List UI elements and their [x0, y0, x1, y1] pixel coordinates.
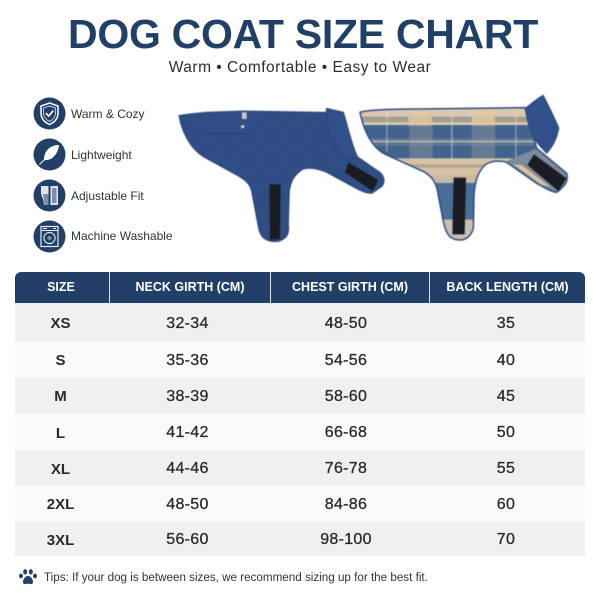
feature label: warm and cozy: Warm & Cozy [71, 107, 145, 121]
row M [15, 377, 585, 413]
row S: 40 [497, 352, 515, 368]
icon: paw print [19, 569, 37, 584]
tip text: Tips: If your dog is between sizes, we recommend sizing up for the best fit. [44, 571, 428, 584]
title: DOG COAT SIZE CHART [68, 11, 538, 57]
row XS: 48-50 [325, 314, 367, 332]
row 3XL: 70 [497, 531, 515, 548]
icon: feather lightweight [34, 138, 66, 170]
row M: 45 [497, 388, 515, 404]
feature label: adjustable fit: Adjustable Fit [71, 189, 144, 203]
row XL: 44-46 [166, 460, 209, 477]
row 2XL [15, 485, 585, 521]
row 2XL: 60 [497, 496, 515, 512]
row 2XL: 84-86 [325, 496, 367, 512]
table header row: NECK GIRTH (CM) [135, 280, 244, 294]
row M: 58-60 [325, 388, 367, 404]
row L: L [56, 424, 65, 442]
icon: adjustable fit straps [34, 180, 66, 212]
row L: 66-68 [325, 424, 367, 441]
row 3XL: 56-60 [166, 531, 209, 548]
feature label: machine washable: Machine Washable [71, 229, 173, 243]
table header row: CHEST GIRTH (CM) [292, 280, 408, 294]
row S: 54-56 [325, 352, 367, 368]
row M: 38-39 [166, 388, 209, 404]
illustration: navy quilted coat [178, 107, 386, 243]
table header row: SIZE [47, 280, 75, 294]
icon: washing machine [34, 220, 66, 252]
row XL: 55 [497, 460, 515, 477]
row L: 50 [497, 424, 515, 441]
icon: shield warm and cozy [34, 98, 66, 130]
row 3XL: 98-100 [320, 531, 372, 548]
row XL: XL [51, 460, 70, 478]
row 3XL: 3XL [47, 532, 74, 548]
row S: S [55, 352, 66, 369]
subtitle: Warm • Comfortable • Easy to Wear [169, 59, 431, 76]
row 2XL: 48-50 [166, 496, 209, 512]
row XL: 76-78 [325, 460, 367, 477]
row L [15, 413, 585, 450]
row M: M [54, 388, 67, 405]
row XS: XS [50, 315, 70, 332]
row S [15, 341, 585, 377]
row L: 41-42 [166, 424, 209, 441]
row XS [15, 303, 585, 341]
row XL [15, 450, 585, 485]
row XS: 35 [497, 314, 515, 332]
table header row: BACK LENGTH (CM) [446, 280, 569, 294]
row S: 35-36 [166, 352, 209, 368]
row 2XL: 2XL [47, 496, 74, 513]
row 3XL [15, 521, 585, 556]
feature label: lightweight: Lightweight [71, 148, 132, 162]
row XS: 32-34 [166, 314, 209, 332]
illustration: plaid coat [358, 94, 569, 242]
table header row [15, 272, 585, 303]
